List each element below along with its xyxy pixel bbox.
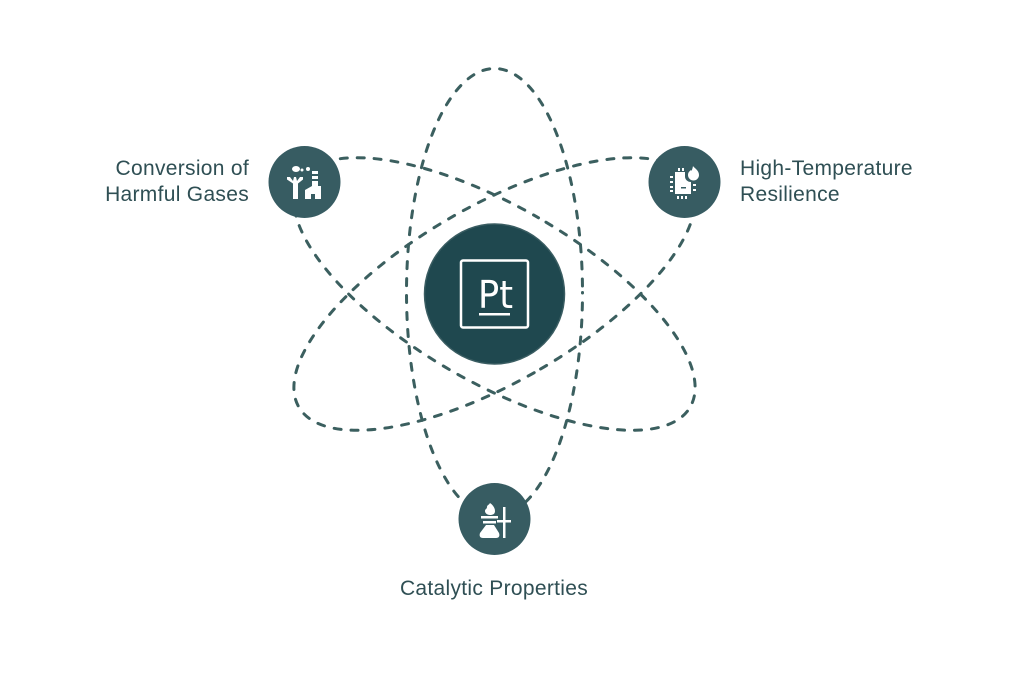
- node: catalytic properties: [458, 483, 530, 555]
- icon: factory and gas: [287, 166, 321, 199]
- icon: chip with flame: [670, 166, 699, 199]
- label: conversion of harmful gases: [105, 157, 249, 206]
- label: conversion of harmful gases: Harmful Gases: [105, 183, 249, 206]
- label: catalytic properties: Catalytic Properties: [400, 577, 588, 600]
- central platinum node: [424, 224, 564, 364]
- label: high-temperature resilience: High-Temperature: [740, 157, 913, 180]
- icon: burner and flask: [480, 503, 511, 538]
- label: conversion of harmful gases: Conversion of: [116, 157, 249, 180]
- node: high-temperature resilience: [648, 146, 720, 218]
- orbit: tilted right: [255, 105, 734, 483]
- label: high-temperature resilience: Resilience: [740, 183, 840, 206]
- label: high-temperature resilience: [740, 157, 913, 206]
- orbit: tilted left: [255, 105, 734, 483]
- node: conversion of harmful gases: [268, 146, 340, 218]
- central platinum node: Pt: [478, 273, 513, 317]
- orbit: vertical: [406, 68, 582, 516]
